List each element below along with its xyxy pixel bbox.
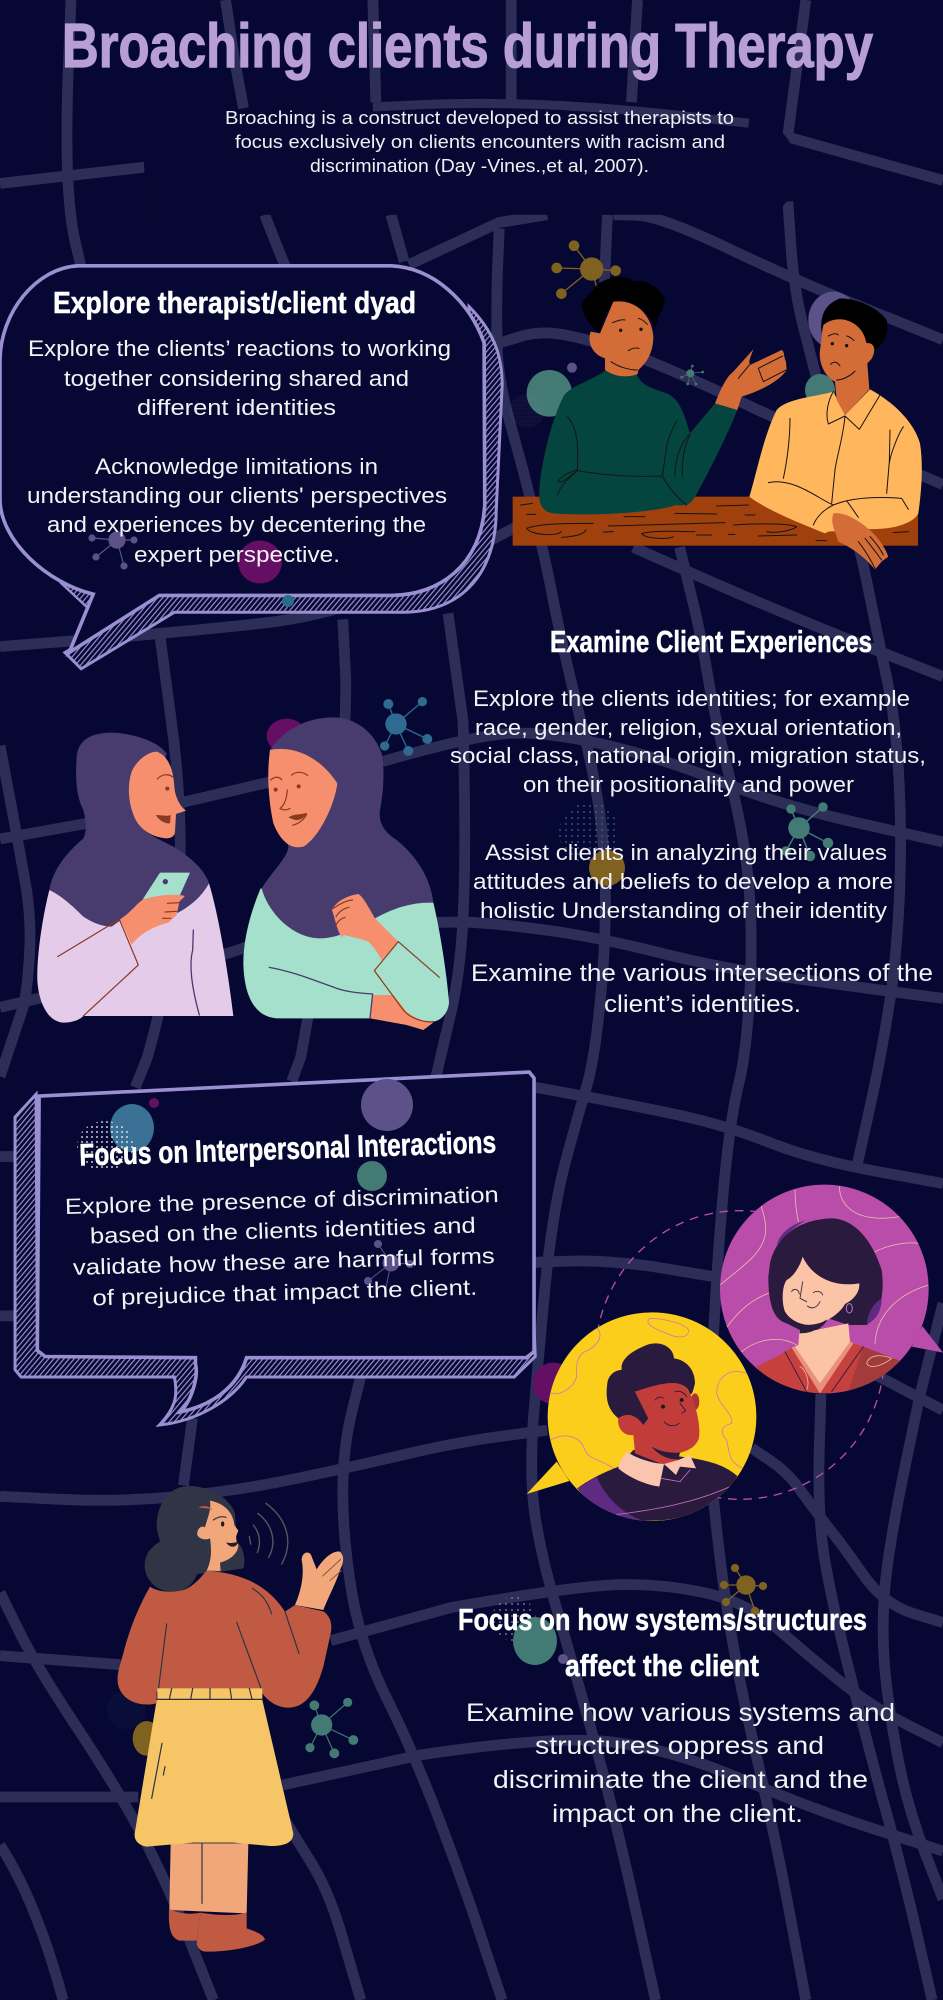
hand [295,1551,343,1610]
decoration: blobs and dots [77,1079,414,1293]
skirt [135,1700,293,1847]
illustration: speech bubble portraits [527,1185,943,1521]
bubble body text: different identities [137,395,336,420]
legs and boots [169,1843,265,1952]
text block: examine client experiences [450,686,933,1018]
paragraph lines: discriminate the client and the [493,1766,868,1794]
paragraph lines: structures oppress and [535,1732,824,1760]
woman: left with phone [37,733,233,1023]
panel: explore therapist/client dyad speech bubble [0,266,502,669]
paragraph lines [466,1699,895,1828]
panel: focus on interpersonal interactions speech box [15,1072,535,1425]
woman: right with crossed arms [243,717,449,1030]
title backdrop mask [144,103,796,215]
waistband [157,1688,262,1699]
paragraph lines: social class, national origin, migration status, [450,743,926,768]
illustration: two people at a table [509,241,922,569]
intro text [225,108,734,176]
bubble body text: Explore the clients’ reactions to working [28,336,451,361]
intro text: Broaching is a construct developed to assist therapists to [225,108,734,128]
paragraph lines: Examine how various systems and [466,1699,895,1727]
paragraph lines: Explore the clients identities; for example [473,686,910,711]
paragraph lines: on their positionality and power [523,772,854,797]
box body text: of prejudice that impact the client. [92,1275,478,1310]
paragraph lines: client’s identities. [604,991,801,1018]
decoration: blue molecule [381,698,432,755]
sweater [118,1571,331,1708]
head and hair [145,1486,244,1592]
bubble body text: and experiences by decentering the [47,512,426,537]
illustration: two women in hijabs [37,698,449,1030]
decoration: molecule and blobs [509,241,858,427]
paragraph lines: Assist clients in analyzing their values [485,840,887,865]
bubble body text: expert perspective. [134,542,340,567]
sound waves [249,1503,288,1564]
bubble body text: Acknowledge limitations in [95,454,378,479]
person: man in green sweater [539,277,787,514]
paragraph lines: attitudes and beliefs to develop a more [473,869,893,894]
decoration: teal molecule [306,1698,358,1758]
illustration: woman speaking [107,1486,358,1952]
text block: focus on how systems/structures [458,1564,895,1828]
heading: focus on interpersonal interactions: Focus on Interpersonal Interactions [79,1124,497,1173]
heading: explore therapist/client dyad: Explore therapist/client dyad [53,285,416,320]
decoration: dots, blob and molecule [559,802,832,886]
portrait: woman in purple bubble [720,1185,943,1393]
intro text: discrimination (Day -Vines.,et al, 2007). [310,156,649,176]
decoration: blue dot [282,595,294,607]
bubble body text: understanding our clients' perspectives [27,483,447,508]
box body text: based on the clients identities and [90,1213,476,1248]
paragraph lines: Examine the various intersections of the [471,960,933,987]
decoration: magenta blob [533,1363,574,1404]
decoration: dots, blob and molecule [492,1564,766,1665]
decoration: magenta blob [238,540,282,584]
paragraph lines: race, gender, religion, sexual orientation, [475,715,902,740]
intro text: focus exclusively on clients encounters with racism and [235,132,725,152]
box body text [65,1182,499,1310]
heading: focus on how systems/structures [458,1602,867,1683]
decoration: dots and blob [107,1691,161,1756]
heading: focus on how systems/structures: affect the client [565,1648,759,1683]
dashed connector [596,1211,884,1499]
person: man in yellow shirt [749,298,922,569]
paragraph lines: impact on the client. [552,1800,803,1828]
bubble body text: together considering shared and [64,366,409,391]
paragraph lines [450,686,933,1018]
box body text: validate how these are harmful forms [73,1243,495,1280]
table [513,497,918,546]
box body text: Explore the presence of discrimination [65,1182,499,1219]
bubble body text [27,336,451,567]
paragraph lines: holistic Understanding of their identity [480,898,887,923]
decoration: magenta blob [267,719,307,753]
decoration: purple molecule [89,532,137,569]
portrait: man in yellow bubble [527,1312,756,1521]
